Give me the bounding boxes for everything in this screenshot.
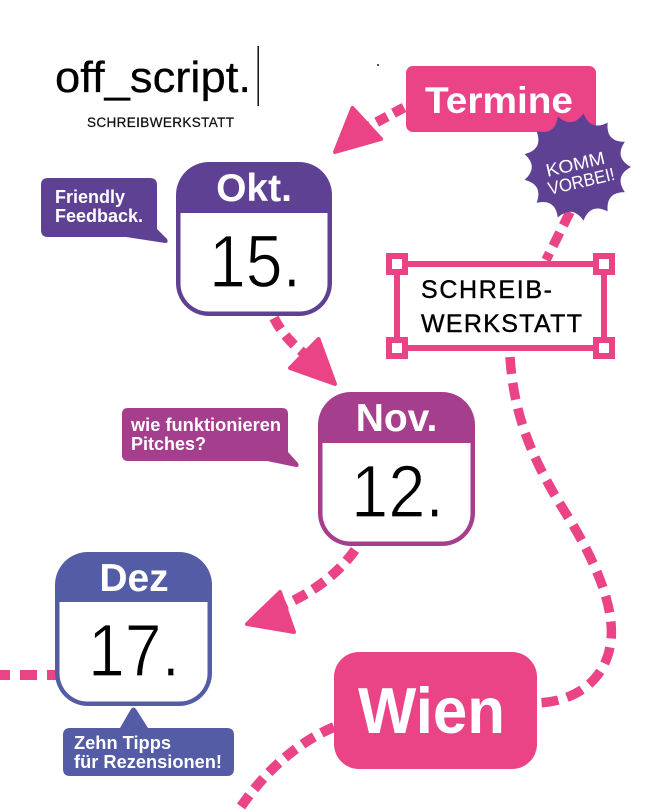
calendar: October 15 — [176, 162, 332, 316]
badge: Komm vorbei: KOMM — [544, 148, 607, 181]
speech bubble: Zehn Tipps — [63, 708, 234, 776]
calendar: October 15: 15. — [209, 220, 301, 303]
arrow: October to November — [274, 318, 335, 384]
speech bubble: wie funktionieren Pitches — [122, 408, 299, 467]
label: Termine: Termine — [425, 80, 573, 121]
calendar: December 17: Dez — [99, 557, 169, 600]
badge: Komm vorbei: VORBEI! — [546, 164, 617, 199]
calendar: December 17 — [55, 552, 212, 706]
speech bubble: wie funktionieren Pitches: Pitches? — [131, 434, 206, 454]
label: Wien — [334, 652, 537, 769]
logo: off_script: SCHREIBWERKSTATT — [87, 115, 234, 130]
calendar: November 12 — [318, 392, 475, 546]
speech bubble: Friendly Feedback: Friendly — [55, 187, 125, 207]
label: Wien: Wien — [358, 674, 505, 747]
calendar: October 15: Okt. — [216, 167, 292, 210]
box: Schreibwerkstatt: SCHREIB- — [421, 276, 552, 304]
calendar: December 17: 17. — [88, 609, 180, 692]
dashed route: Wien to bottom edge — [240, 727, 334, 808]
speech bubble: Zehn Tipps: für Rezensionen! — [74, 752, 222, 772]
box: Schreibwerkstatt: WERKSTATT — [421, 310, 582, 338]
logo: off_script — [55, 46, 259, 130]
arrow: November to December — [247, 550, 355, 632]
arrow: Termine to October — [335, 108, 404, 152]
dashed route: workshop box to Wien — [510, 357, 611, 703]
speech bubble: wie funktionieren Pitches: wie funktionieren — [130, 415, 281, 435]
label: Termine — [406, 66, 596, 132]
box: Schreibwerkstatt — [389, 256, 612, 356]
logo: off_script: off_script. — [55, 53, 251, 102]
calendar: November 12: 12. — [351, 450, 444, 533]
dashed route: burst to workshop box — [546, 212, 570, 260]
speech bubble: Friendly Feedback: Feedback. — [55, 206, 143, 226]
badge: Komm vorbei — [525, 113, 631, 221]
speech bubble: Friendly Feedback — [41, 178, 168, 243]
dashed route: left edge to December — [0, 670, 56, 680]
speech bubble: Zehn Tipps: Zehn Tipps — [74, 733, 171, 753]
calendar: November 12: Nov. — [356, 397, 437, 440]
